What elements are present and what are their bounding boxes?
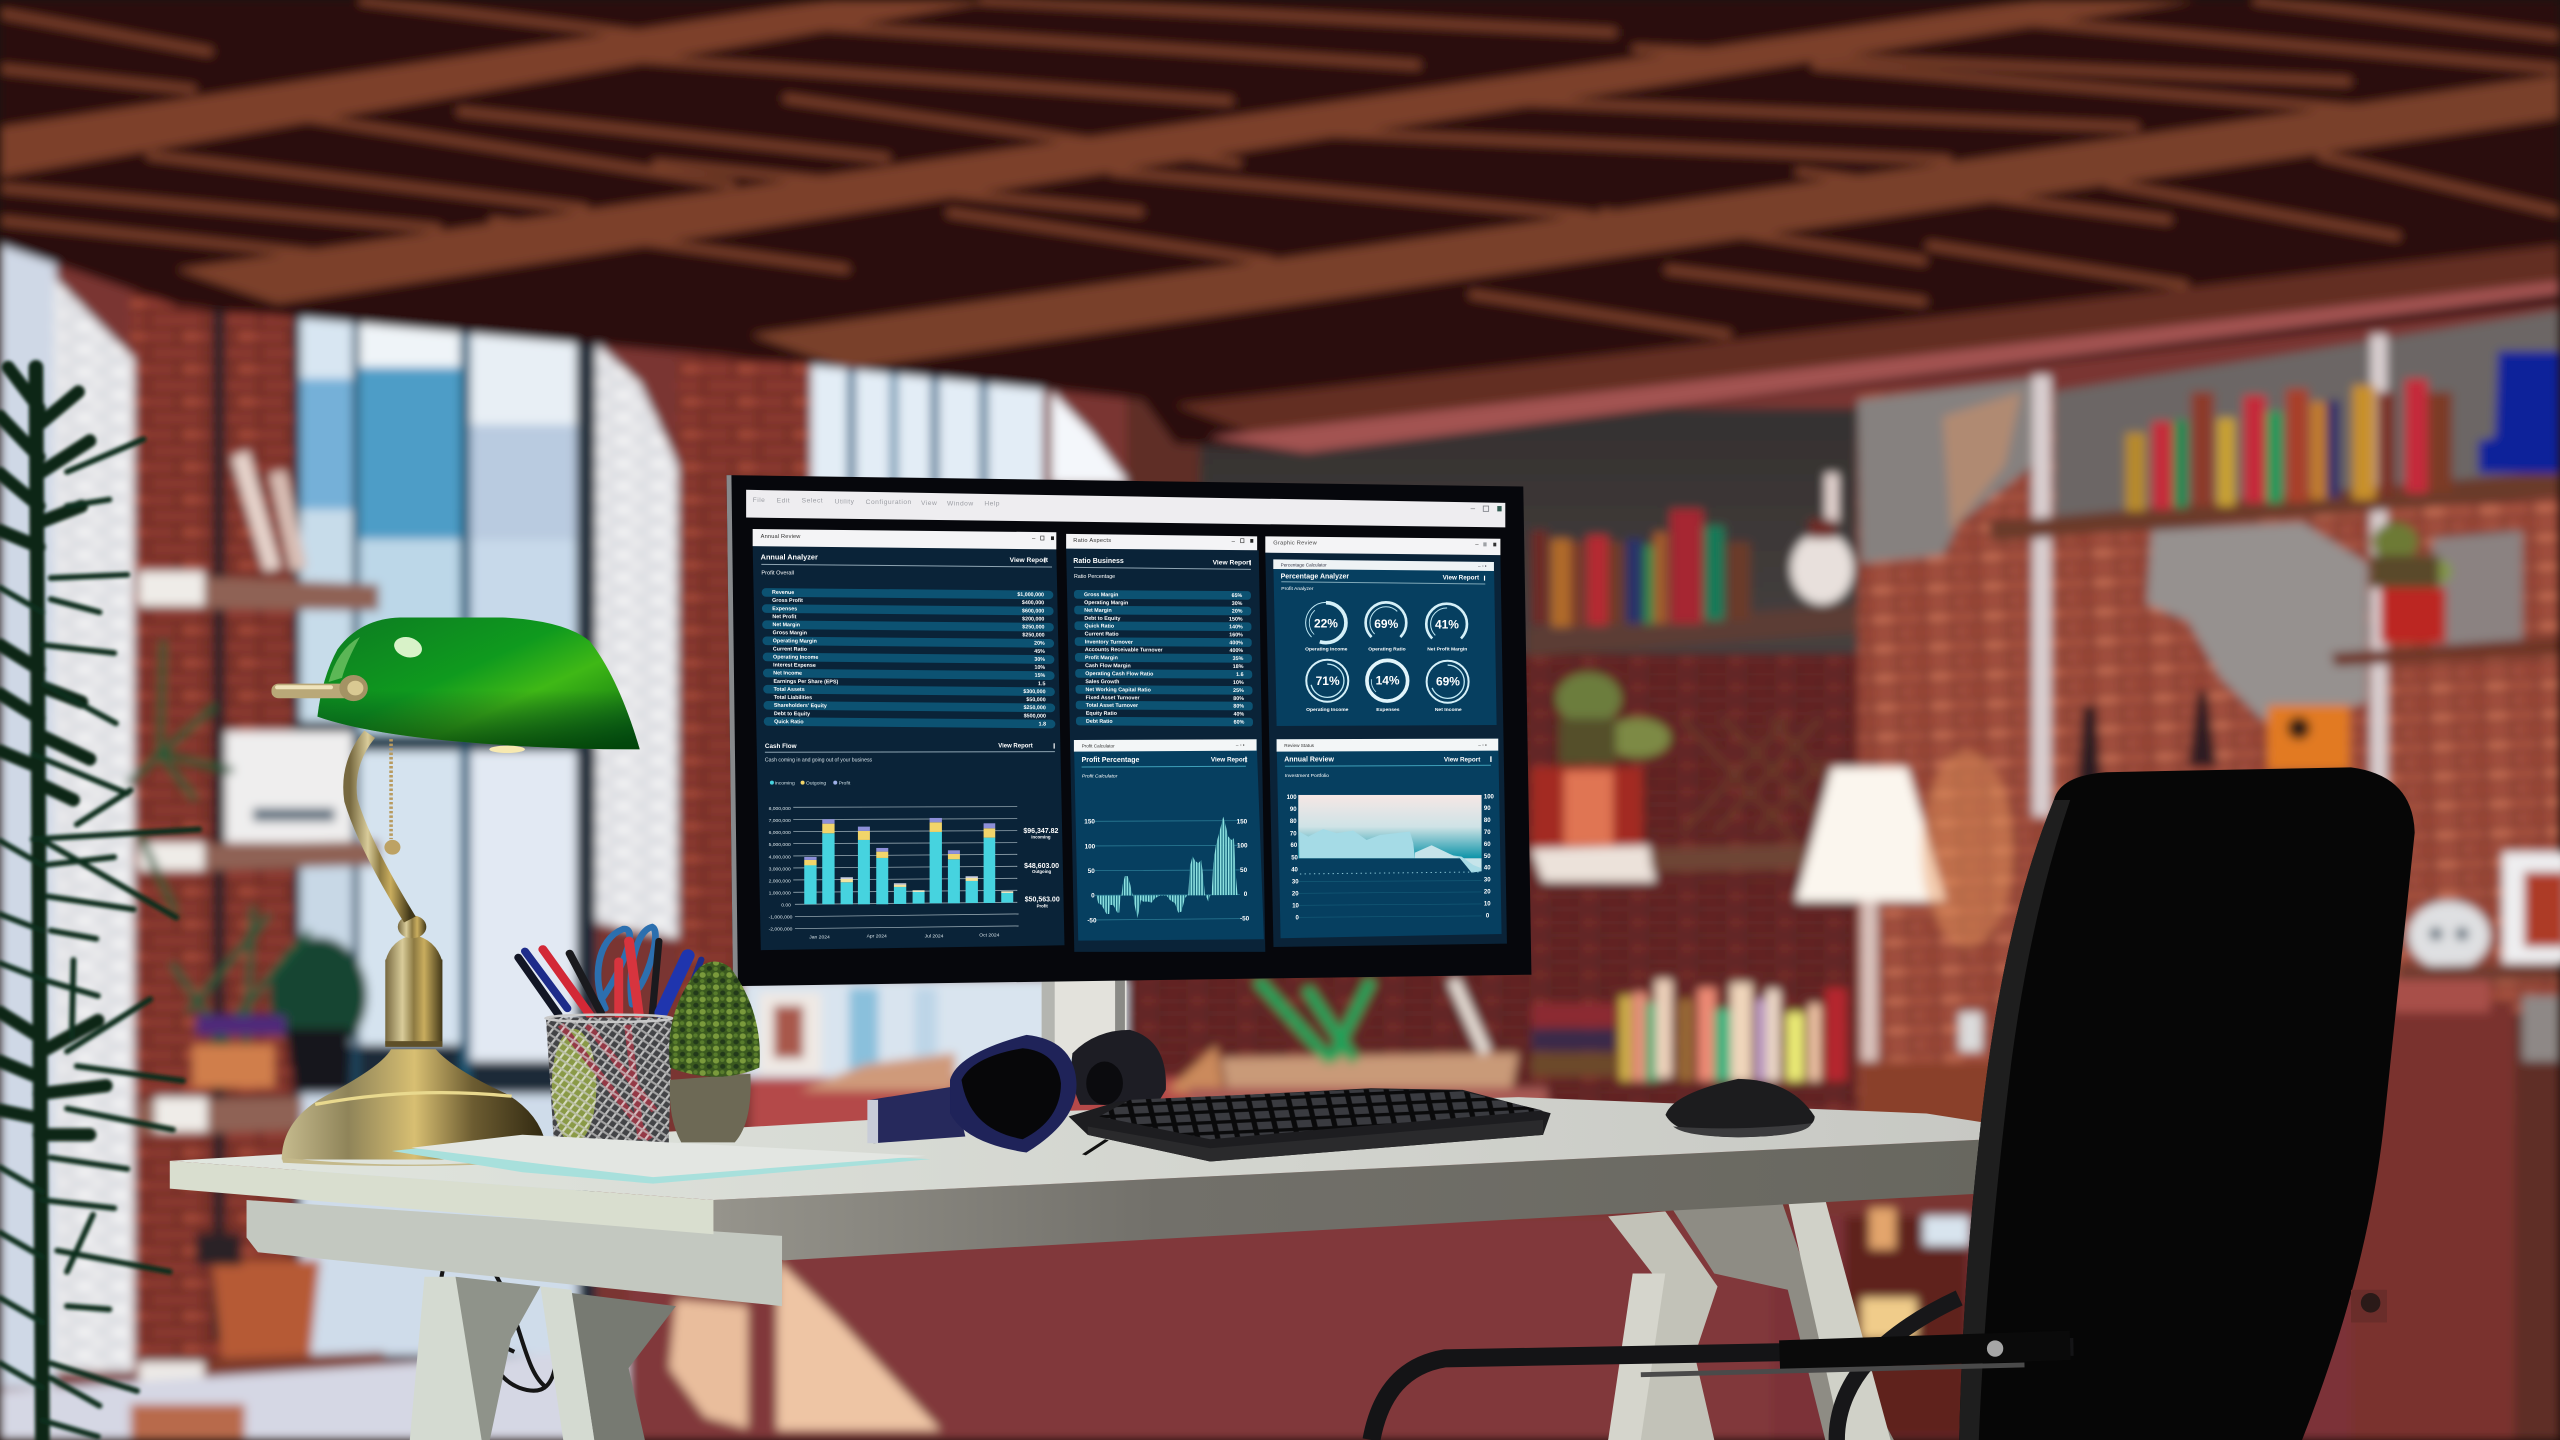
mouse [1665,1079,1815,1137]
panel: annual review: – [1032,536,1036,542]
cables [441,1265,557,1391]
table: ratio figures: Sales Growth [1085,679,1119,685]
white brick column by window [596,343,678,939]
speaker and bottles [2073,692,2349,808]
gauge: net income 69: Net Income [1435,707,1462,713]
investment portfolio chart: 70 [1290,831,1297,837]
centre window [811,353,1128,516]
profit area chart: 150 [1237,818,1248,825]
gauge: expenses 14: 14% [1376,674,1400,688]
banker's lamp [271,617,640,1166]
y axis: -2,000,000 [769,927,793,933]
table: annual figures: Operating Income [773,654,818,661]
table: annual figures: 45% [1034,649,1045,655]
gauge: net income 69 [1427,661,1469,713]
monitor [727,475,1531,986]
cash flow totals: $48,603.00 [1024,863,1059,870]
gauge: operating ratio 69 [1357,594,1415,652]
table: ratio figures: Net Working Capital Ratio [1085,687,1152,693]
gauge: operating income 22 [1297,594,1355,652]
green plant behind keyboard [1257,980,1486,1061]
foreground plant [0,367,199,1440]
y axis: 8,000,000 [769,806,791,812]
low books [1531,980,1847,1081]
x axis: Apr 2024 [867,934,887,940]
table: annual figures: $500,000 [1024,713,1046,720]
y axis: 6,000,000 [769,830,791,836]
table: ratio figures: Operating Margin [1084,600,1128,606]
window under monitor [743,980,1127,1078]
panel: ratio aspects: Ratio Aspects [1073,538,1111,544]
y axis: 5,000,000 [769,842,791,848]
dark alcove wall [1143,408,1861,669]
monitor bezel [727,475,1531,986]
table: annual figures: Total Assets [774,687,805,693]
main window [294,291,596,1360]
cash flow totals: Profit [1037,903,1048,908]
menu bar: Configuration [866,499,912,506]
gauge: operating income 71: Operating Income [1306,707,1349,713]
table: annual figures: Quick Ratio [774,719,804,725]
left shelves and decor [139,575,379,611]
investment portfolio chart: 40 [1291,867,1299,873]
menu bar: Edit [777,497,790,504]
stacked bars [804,818,1013,904]
cash flow chart: Cash coming in and going out of your business [765,757,873,763]
table: ratio figures: 30% [1232,601,1243,607]
profit area chart: -50 [1087,917,1097,924]
table: ratio figures: 80% [1233,696,1244,702]
near ear cup [950,1035,1077,1153]
lamp socket [271,675,368,701]
chair armrest [1371,1340,2073,1440]
lamp base [282,915,547,1166]
left white brick column [54,278,134,1371]
panel: annual review: Profit Overall [761,570,794,576]
table: ratio figures: 160% [1229,632,1243,638]
right pot plant [2331,522,2560,666]
chair lower frame [1837,1298,1959,1440]
table: ratio figures: Profit Margin [1085,655,1118,661]
plant stem [36,367,42,1440]
menu bar: Help [984,501,1000,508]
panel: profit calculator [1074,739,1264,941]
table: annual figures: $600,000 [1022,608,1044,615]
table: ratio figures: 60% [1234,720,1245,726]
table: ratio figures: 40% [1233,712,1244,718]
chair side knob [2351,1290,2387,1322]
panel: graphic review [1265,536,1507,947]
investment portfolio chart: 60 [1291,843,1298,849]
floor lamp [1796,751,2013,1064]
cash flow totals [1023,828,1060,908]
panel: review status [1277,739,1502,938]
profit area chart: 0 [1244,891,1248,898]
panel: graphic review: – [1475,542,1479,548]
table: annual figures: Earnings Per Share (EPS) [773,679,839,685]
gauge: operating income 71 [1306,660,1349,713]
table: annual figures: $250,000 [1022,624,1045,631]
legend: Profit [839,781,851,787]
panel: percentage calculator: Profit Analyzer [1281,586,1314,592]
left pale window strip [0,245,56,1388]
cash flow chart: Cash Flow [765,743,797,750]
gauge: operating ratio 69: Operating Ratio [1368,646,1406,652]
upper grey plaster [2054,310,2560,522]
panel: review status: Review Status [1284,743,1315,748]
gauge: operating income 22: Operating Income [1305,646,1348,652]
profit area chart: 50 [1240,867,1248,874]
table: ratio figures: Gross Margin [1084,592,1118,598]
panel: percentage calculator: – ▫ ▪ [1478,564,1487,569]
table: ratio figures: Total Asset Turnover [1086,703,1138,709]
office chair [1371,767,2415,1440]
table: ratio figures [1074,590,1253,726]
far ear cup [1071,1030,1166,1105]
table: annual figures: 10% [1034,665,1045,671]
investment portfolio chart: 0 [1296,916,1300,922]
table: annual figures: 1.8 [1039,722,1046,728]
desk side face [170,1161,713,1234]
panel: profit calculator: View Report [1211,757,1248,764]
menu bar [746,490,1505,527]
panel: profit calculator: Profit Calculator [1082,773,1118,779]
table: ratio figures: Cash Flow Margin [1085,663,1131,669]
table: annual figures: $250,000 [1022,632,1045,639]
menu bar: Select [802,498,823,505]
chair back [1959,767,2415,1440]
table: ratio figures: 400% [1229,640,1243,646]
panel: review status: Annual Review [1284,757,1334,764]
investment portfolio chart: 100 [1484,794,1495,800]
investment portfolio chart: 10 [1484,902,1491,908]
terracotta planter under desk [212,1260,320,1358]
skull and frame [2397,852,2560,983]
panel: review status: – ▫ ▪ [1478,742,1487,747]
table: ratio figures: Equity Ratio [1086,711,1118,717]
investment portfolio chart: 10 [1292,904,1300,910]
table: annual figures: Current Ratio [773,646,808,653]
table: ratio figures: 25% [1233,688,1244,694]
cash flow chart [765,743,1060,940]
investment portfolio chart: 80 [1484,818,1491,824]
gauge: net profit margin 41 [1418,595,1475,653]
panel: annual review: View Report [1010,557,1049,564]
table: annual figures: 30% [1034,657,1045,663]
panel: percentage calculator: View Report [1443,575,1480,582]
pull chain [384,739,400,855]
table: ratio figures: 1.6 [1236,672,1244,678]
table: ratio figures: 18% [1233,664,1244,670]
maroon back wall below desk [629,1216,2359,1440]
panel: annual review: Annual Review [761,534,801,540]
table: ratio figures: Net Margin [1084,608,1112,614]
table: ratio figures: 80% [1233,704,1244,710]
table: annual figures: Gross Profit [772,598,803,604]
panel: ratio aspects: – [1232,539,1236,545]
keyboard [1069,1088,1551,1162]
cash flow totals: Outgoing [1032,869,1052,874]
table: annual figures: $300,000 [1023,689,1046,695]
cash flow chart: View Report [998,744,1033,750]
paper folder [392,1135,931,1184]
gauge: net income 69: 69% [1436,675,1460,689]
mesh cup [546,1015,672,1144]
gauge: net profit margin 41: 41% [1435,617,1459,631]
desk legs left [410,1277,676,1440]
investment portfolio chart: 70 [1484,830,1491,836]
panel: annual review [753,529,1064,950]
sofa and cushions [751,1045,1548,1140]
y axis: 2,000,000 [769,878,791,884]
table: ratio figures: Quick Ratio [1084,623,1115,630]
panel: profit calculator: Profit Calculator [1082,743,1115,748]
investment portfolio chart: 20 [1292,892,1299,898]
investment portfolio chart [1287,794,1495,922]
table: ratio figures: 150% [1229,617,1243,623]
gauge: operating income 22: 22% [1314,616,1338,630]
legend: Outgoing [806,781,826,787]
alcove pot and plant [1531,673,1806,882]
blue object on shelf [2478,351,2560,473]
y axis: -1,000,000 [769,915,793,921]
menu bar: Window [947,500,974,507]
panel: review status: View Report [1444,756,1481,763]
dense leaf clusters [0,367,106,1135]
table: annual figures: Interest Expense [773,662,816,669]
investment portfolio chart: 30 [1484,878,1491,884]
long fronds [0,439,199,1437]
table: annual figures: Operating Margin [773,638,817,645]
table: annual figures: Net Income [773,670,802,677]
panel: ratio aspects [1066,534,1265,952]
table: annual figures: $1,000,000 [1017,592,1044,598]
desk front face [713,1140,1982,1260]
right maroon cabinet [1861,980,2560,1440]
alcove lower brick [1127,653,1861,1110]
profit area chart [1084,817,1250,924]
dark post [212,294,225,1339]
table: ratio figures: 65% [1232,593,1243,599]
table: ratio figures: Debt Ratio [1086,719,1113,725]
table: annual figures: $400,000 [1022,600,1044,606]
cash flow totals: Incoming [1031,835,1051,840]
picture under monitor [759,993,821,1074]
ceiling [0,0,2560,452]
table: annual figures: $250,000 [1024,705,1046,711]
table: annual figures: 15% [1035,673,1046,679]
table: ratio figures: 35% [1233,656,1244,662]
left shelf plants [171,906,367,1091]
table: annual figures: Shareholders' Equity [774,703,827,709]
panel: percentage calculator: Percentage Calculator [1281,562,1327,567]
desk top [170,1097,1989,1200]
table: ratio figures: 400% [1229,648,1243,654]
cash flow totals: $96,347.82 [1023,828,1058,835]
investment portfolio chart: 0 [1486,913,1490,919]
table: ratio figures: Debt to Equity [1084,616,1121,622]
investment portfolio chart: 20 [1484,890,1491,896]
menu bar: File [753,497,765,504]
y axis: 4,000,000 [769,854,791,860]
investment portfolio chart: 100 [1287,795,1297,801]
table: ratio figures: Operating Cash Flow Ratio [1085,671,1154,678]
table: annual figures: Revenue [772,590,794,596]
profit area chart: 100 [1237,842,1248,849]
table: annual figures: Net Profit [772,614,797,620]
legend [770,781,851,787]
investment portfolio chart: 90 [1290,807,1297,813]
table: annual figures: Net Margin [772,622,800,628]
menu bar: – [1471,504,1476,513]
headband [870,1087,965,1143]
pencil holder with pens [518,927,701,1144]
table: annual figures [762,588,1055,728]
desk legs right [1608,1195,1894,1440]
investment portfolio chart: 80 [1290,819,1297,825]
gauge: operating income 71: 71% [1316,674,1340,688]
plaster patch left [1858,379,2033,563]
table: ratio figures: 20% [1232,609,1243,615]
panel: review status: Investment Portfolio [1285,773,1329,779]
investment portfolio chart: 50 [1291,855,1299,861]
table: annual figures: 20% [1034,641,1045,647]
y axis [769,806,793,933]
table: annual figures: Expenses [772,606,797,612]
panel: ratio aspects: View Report [1213,560,1252,567]
lamp shade [317,617,640,753]
table: annual figures: 1.5 [1038,681,1045,687]
table: annual figures: Gross Margin [773,630,807,636]
y axis: 3,000,000 [769,866,791,872]
centre brick column [678,356,815,1009]
profit area chart: 100 [1085,843,1096,850]
table: annual figures: Debt to Equity [774,711,810,717]
frond plant on shelf [127,640,233,914]
profit area chart: -50 [1240,916,1250,923]
gauge: expenses 14 [1365,658,1410,713]
panel: ratio aspects: Ratio Business [1073,558,1124,565]
floor [0,1347,653,1440]
headphones [867,1030,1166,1153]
table: ratio figures: Fixed Asset Turnover [1086,695,1140,701]
profit area chart: 150 [1084,819,1095,826]
white posts [2033,376,2051,816]
menu bar: Utility [835,498,855,505]
investment portfolio chart: 40 [1484,866,1491,872]
table: ratio figures: Current Ratio [1085,631,1119,638]
panel: profit calculator: Profit Percentage [1082,757,1140,764]
profit area chart: 0 [1091,893,1095,900]
behind chair glints [1845,1208,1969,1437]
cash flow totals: $50,563.00 [1025,897,1060,904]
plaster patch centre [2147,522,2367,727]
investment portfolio chart: 50 [1484,854,1491,860]
profit area chart: 50 [1088,868,1095,875]
table: ratio figures: 140% [1229,624,1243,630]
x axis: Jul 2024 [925,933,944,939]
panel: graphic review: Graphic Review [1273,541,1318,547]
table: ratio figures: 10% [1233,680,1244,686]
investment portfolio chart: 30 [1292,879,1299,885]
menu bar: View [921,500,937,507]
apron [247,1200,782,1306]
gauge: operating ratio 69: 69% [1374,617,1399,631]
investment portfolio chart: 60 [1484,842,1491,848]
panel: annual review: Annual Analyzer [761,552,818,561]
x axis: Jan 2024 [809,934,830,940]
alcove shelf with books [1527,473,1858,656]
right shelf books [2126,379,2452,511]
potted topiary [669,962,760,1142]
panel: profit calculator: – ▫ ▪ [1236,743,1245,748]
panel: percentage calculator: Percentage Analyzer [1281,573,1349,580]
y axis: 7,000,000 [769,818,791,824]
gauge: expenses 14: Expenses [1376,707,1400,713]
table: ratio figures: Accounts Receivable Turnover [1085,647,1163,654]
left brick wall [131,245,310,1371]
lamp stem [350,734,410,920]
y axis: 0.00 [781,902,791,908]
investment portfolio chart: 90 [1484,806,1491,812]
panel: ratio aspects: Ratio Percentage [1074,574,1115,580]
y axis: 1,000,000 [769,890,791,896]
legend: Incoming [775,781,795,787]
main ceiling beams [0,0,996,176]
panel: percentage calculator [1273,559,1497,726]
monitor stand [1042,976,1127,1058]
table: annual figures: $50,000 [1026,697,1046,703]
wine rack [1682,718,1825,841]
right shelf [1989,470,2560,542]
table: ratio figures: Inventory Turnover [1085,639,1133,646]
right brick wall [1858,392,2560,1127]
sunlight patches [669,1300,748,1429]
gauge: net profit margin 41: Net Profit Margin [1427,647,1467,653]
desk [170,1097,1989,1440]
x axis [809,932,1000,940]
table: annual figures: Total Liabilities [774,695,812,701]
pens [518,927,701,1015]
table: annual figures: $200,000 [1022,616,1044,623]
x axis: Oct 2024 [979,932,1000,938]
